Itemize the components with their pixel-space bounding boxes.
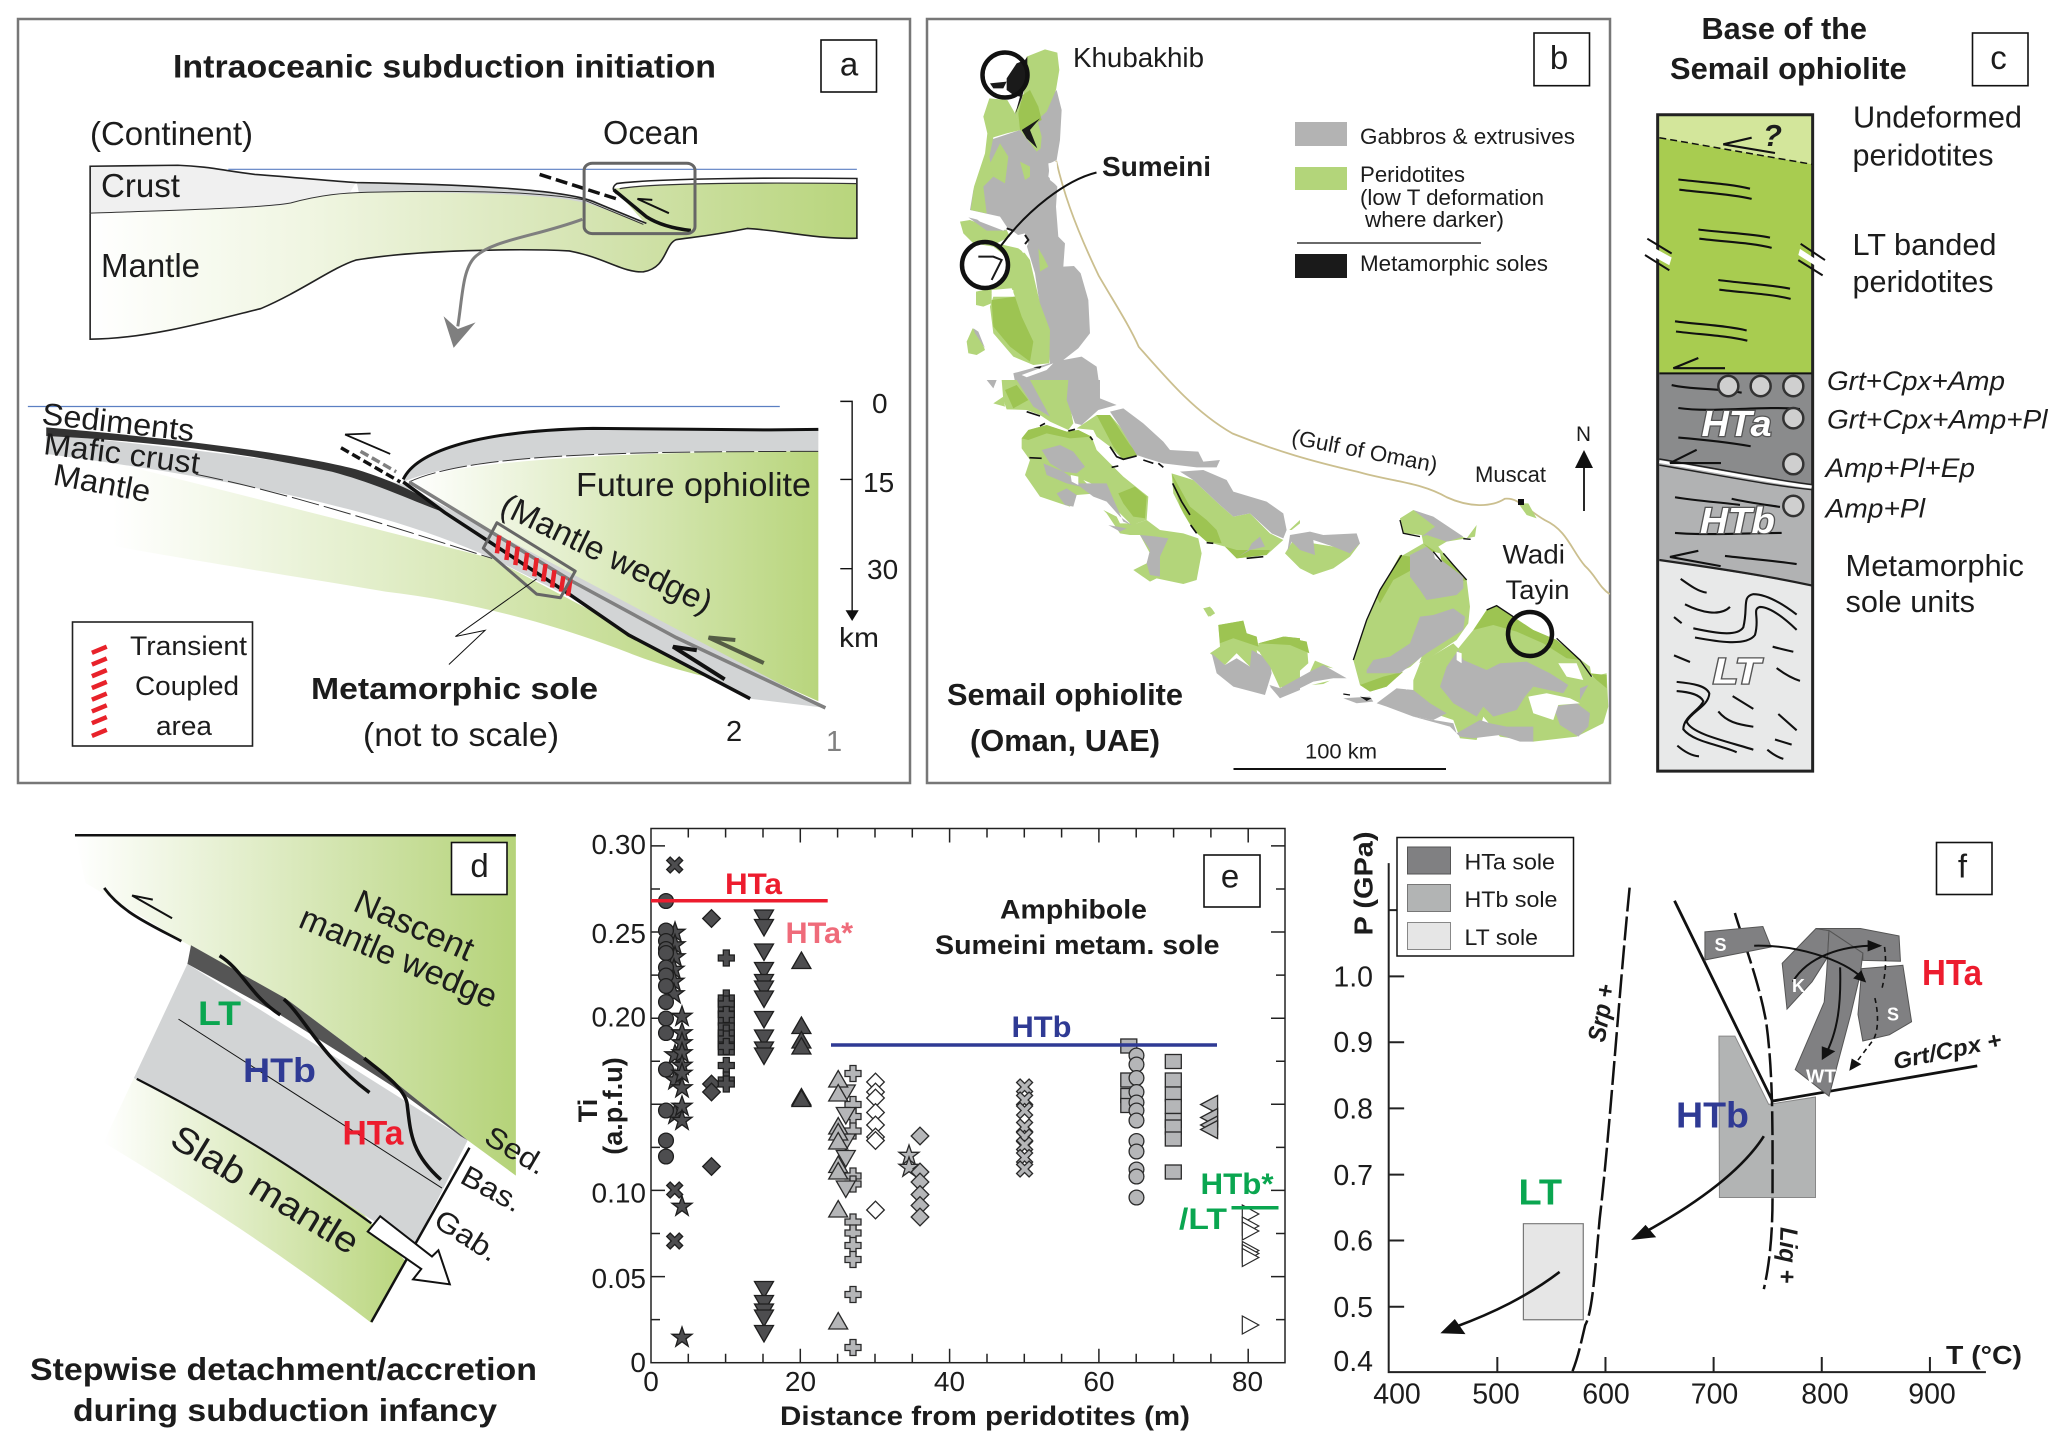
field letters: WT xyxy=(1806,1066,1836,1086)
mineral assemblages: Grt+Cpx+Amp xyxy=(1827,366,2005,396)
stratigraphic column xyxy=(1645,115,1825,771)
panel a labels: 2 xyxy=(726,716,742,748)
map: study area circles xyxy=(962,52,1552,656)
axis titles: T (°C) xyxy=(1946,1340,2022,1370)
panel b: Semail ophiolite map xyxy=(927,19,1610,783)
y axis title: (a.p.f.u) xyxy=(598,1057,628,1155)
panel c letter xyxy=(1972,33,2028,86)
north arrow xyxy=(1575,423,1593,511)
panel d unit labels: LT xyxy=(198,995,241,1033)
panel a labels xyxy=(40,114,842,758)
x axis tick labels: 60 xyxy=(1083,1366,1115,1397)
panel c: base of the ophiolite column xyxy=(1645,12,2049,771)
panel d rock labels: Gab. xyxy=(428,1204,504,1269)
panel a labels: Future ophiolite xyxy=(576,466,811,503)
P-T unit labels xyxy=(1518,952,1983,1212)
panel f letter: f xyxy=(1958,848,1968,884)
panel a: intraoceanic subduction initiation xyxy=(18,19,910,783)
panel e letter: e xyxy=(1221,858,1239,894)
panel d rock labels: mantle wedge xyxy=(294,899,503,1016)
phase boundaries xyxy=(1572,888,1977,1372)
map labels: (Oman, UAE) xyxy=(970,724,1160,758)
x axis tick labels: 40 xyxy=(934,1366,965,1397)
T axis tick labels: 800 xyxy=(1801,1378,1849,1410)
y axis tick labels: 0.20 xyxy=(592,1002,646,1032)
series labels: HTa xyxy=(725,868,782,901)
HTa range line xyxy=(651,899,828,903)
x axis tick labels xyxy=(643,1366,1263,1397)
panel d rock labels: Nascent xyxy=(348,883,480,969)
panel b frame xyxy=(927,19,1610,783)
map legend: Peridotites xyxy=(1360,162,1465,187)
map: northern block xyxy=(960,49,1100,390)
column unit labels: HTb xyxy=(1700,500,1775,541)
P-T path arrows xyxy=(1440,940,1886,1334)
panel a labels: Mantle xyxy=(101,247,200,284)
column annotations: peridotites xyxy=(1852,138,1994,172)
panel d rock labels: Sed. xyxy=(479,1121,552,1182)
mineral assemblages xyxy=(1823,366,2049,524)
phase boundary labels: Srp + xyxy=(1583,982,1621,1044)
panel a labels: (not to scale) xyxy=(363,716,559,753)
mineral assemblages: Amp+Pl xyxy=(1823,494,1926,524)
P axis tick labels: 0.8 xyxy=(1333,1094,1373,1126)
HTb field xyxy=(1719,1036,1815,1198)
chart frame and ticks xyxy=(651,828,1285,1363)
LT range line xyxy=(1232,1206,1278,1210)
map labels xyxy=(947,42,1570,758)
P-T unit labels: HTa xyxy=(1922,952,1983,993)
axis titles xyxy=(1348,832,2022,1370)
chart title: Amphibole xyxy=(1000,894,1147,924)
Muscat marker xyxy=(1518,499,1524,505)
panel d: stepwise detachment sketch xyxy=(30,835,552,1428)
nascent mantle wedge xyxy=(75,835,516,1176)
panel a title: Intraoceanic subduction initiation xyxy=(173,48,716,84)
P-T unit labels: LT xyxy=(1518,1172,1562,1212)
field letters: K xyxy=(1792,976,1805,996)
panel a labels: Ocean xyxy=(603,114,699,151)
red hatch: transient coupled area xyxy=(497,536,570,596)
panel a labels: Mafic crust xyxy=(42,426,202,481)
panel d unit labels xyxy=(198,995,405,1152)
question mark: ? xyxy=(1763,118,1782,153)
map labels: Muscat xyxy=(1475,462,1546,487)
map labels: (Gulf of Oman) xyxy=(1290,424,1440,477)
chart title xyxy=(935,894,1220,960)
panel d rock labels: Bas. xyxy=(455,1160,528,1219)
depth scale: km xyxy=(839,622,879,653)
panel a letter xyxy=(821,40,876,92)
LT field xyxy=(1523,1224,1583,1320)
legend: transient coupled area: Coupled xyxy=(135,671,239,701)
panel f letter xyxy=(1936,842,1992,894)
depth scale: 30 xyxy=(867,554,898,585)
panel a labels: Mantle xyxy=(51,457,153,509)
P axis tick labels: 0.7 xyxy=(1333,1160,1373,1192)
panel e: amphibole Ti scatter chart xyxy=(573,828,1285,1431)
panel d rock labels xyxy=(164,883,552,1269)
field letters: S xyxy=(1887,1004,1899,1024)
column unit labels: LT xyxy=(1713,650,1763,692)
y axis tick labels xyxy=(592,829,646,1378)
panel a labels: Metamorphic sole xyxy=(311,671,598,706)
map labels: Sumeini xyxy=(1102,151,1211,182)
cross section: future ophiolite and mantle wedge xyxy=(28,406,825,708)
crust layers and thrusts xyxy=(104,888,469,1322)
white subduction arrow xyxy=(368,1216,450,1284)
column annotations: peridotites xyxy=(1852,265,1994,299)
panel f: P-T diagram xyxy=(1333,832,2022,1410)
y axis title xyxy=(573,1057,628,1155)
x axis title: Distance from peridotites (m) xyxy=(780,1401,1190,1431)
panel b letter: b xyxy=(1550,39,1568,76)
HTb range line xyxy=(831,1043,1217,1047)
HTb star / LT data points xyxy=(1242,1205,1259,1334)
mineral assemblages: Grt+Cpx+Amp+Pl xyxy=(1827,404,2049,434)
series labels xyxy=(725,868,1274,1236)
north arrow: N xyxy=(1576,423,1591,446)
mineral assemblages: Amp+Pl+Ep xyxy=(1823,453,1975,483)
leader line to Sumeini xyxy=(1000,172,1096,247)
callout box and leader to metamorphic sole xyxy=(449,523,575,665)
panel a labels: (Continent) xyxy=(90,115,253,152)
column annotations: LT banded xyxy=(1852,228,1996,262)
column annotations: Undeformed xyxy=(1853,100,2022,134)
HTb data points xyxy=(829,1039,1218,1356)
map: coastline xyxy=(1056,161,1610,594)
cross section: continent to ocean xyxy=(90,163,857,339)
map legend: where darker) xyxy=(1364,207,1504,232)
scale bar: 100 km xyxy=(1305,740,1377,764)
T axis tick labels: 700 xyxy=(1691,1378,1738,1410)
panel a labels: (Mantle wedge) xyxy=(495,486,719,621)
P-T unit labels: HTb xyxy=(1676,1094,1749,1136)
P axis tick labels xyxy=(1333,962,1373,1378)
map: south-eastern blocks xyxy=(1203,503,1608,742)
panel a labels: Sediments xyxy=(40,396,196,448)
T axis tick labels: 900 xyxy=(1908,1378,1956,1410)
map legend: Gabbros & extrusives xyxy=(1360,124,1575,149)
map: central blocks xyxy=(987,380,1300,698)
legend: transient coupled area: area xyxy=(156,711,213,741)
map legend: Metamorphic soles xyxy=(1360,251,1548,276)
T axis tick labels xyxy=(1373,1378,1956,1410)
y axis tick labels: 0.05 xyxy=(592,1263,646,1294)
map labels: Tayin xyxy=(1506,575,1570,605)
panel c title: Semail ophiolite xyxy=(1670,52,1907,86)
P-T legend: HTb sole xyxy=(1464,887,1558,912)
panel a labels: Crust xyxy=(101,167,180,204)
P axis tick labels: 0.6 xyxy=(1333,1226,1373,1258)
panel c title: Base of the xyxy=(1702,12,1867,46)
map legend xyxy=(1295,122,1575,278)
phase boundary labels xyxy=(1583,982,2004,1284)
panel d unit labels: HTb xyxy=(243,1052,316,1090)
P-T legend xyxy=(1397,838,1574,956)
series labels: HTa* xyxy=(786,917,853,950)
map labels: Wadi xyxy=(1502,540,1565,570)
x axis tick labels: 20 xyxy=(785,1366,816,1397)
map labels: Khubakhib xyxy=(1073,42,1204,73)
series labels: HTb* xyxy=(1200,1168,1274,1201)
depth scale xyxy=(839,388,898,653)
column annotations: sole units xyxy=(1846,585,1975,619)
P axis tick labels: 1.0 xyxy=(1333,962,1373,994)
phase boundary labels: Grt/Cpx + xyxy=(1891,1026,2004,1074)
P axis tick labels: 0.5 xyxy=(1333,1292,1373,1324)
panel b letter xyxy=(1534,33,1590,86)
y axis tick labels: 0.30 xyxy=(592,829,646,860)
column unit labels xyxy=(1700,403,1775,692)
y axis title: Ti xyxy=(573,1099,603,1122)
field letters: S xyxy=(1714,935,1727,955)
P axis tick labels: 0.9 xyxy=(1333,1027,1373,1059)
panel a letter: a xyxy=(840,46,859,82)
HTa data points xyxy=(659,857,811,1346)
panel a labels: 1 xyxy=(826,726,842,758)
depth scale: 0 xyxy=(872,388,888,419)
axis titles: P (GPa) xyxy=(1348,832,1378,935)
panel d letter xyxy=(452,842,507,894)
P-T legend: LT sole xyxy=(1464,925,1538,950)
legend: transient coupled area xyxy=(72,622,252,746)
panel d caption: during subduction infancy xyxy=(73,1392,498,1428)
axes and ticks xyxy=(1389,863,1986,1372)
P axis tick labels: 0.4 xyxy=(1333,1346,1373,1378)
y axis tick labels: 0 xyxy=(630,1347,646,1378)
map legend: (low T deformation xyxy=(1360,185,1544,210)
map labels: Semail ophiolite xyxy=(947,678,1183,712)
series labels: HTb xyxy=(1012,1011,1072,1044)
panel c title xyxy=(1670,12,1907,86)
HTa fields xyxy=(1705,927,1912,1096)
panel d caption xyxy=(30,1351,537,1428)
series labels: /LT xyxy=(1179,1203,1227,1236)
column unit labels: HTa xyxy=(1702,403,1772,444)
x axis tick labels: 80 xyxy=(1232,1366,1263,1397)
T axis tick labels: 500 xyxy=(1472,1378,1520,1410)
arrow: zoom into subduction detail xyxy=(444,219,582,348)
panel a frame xyxy=(18,19,910,783)
column annotations xyxy=(1846,100,2024,619)
field letters xyxy=(1714,935,1899,1086)
chart title: Sumeini metam. sole xyxy=(935,930,1220,960)
legend: transient coupled area: Transient xyxy=(130,631,248,661)
y axis tick labels: 0.25 xyxy=(592,918,646,949)
phase boundary labels: Liq + xyxy=(1773,1227,1802,1284)
T axis tick labels: 600 xyxy=(1582,1378,1630,1410)
panel e letter xyxy=(1204,855,1260,907)
x axis tick labels: 0 xyxy=(643,1366,659,1397)
panel c letter: c xyxy=(1990,39,2007,76)
panel d rock labels: Slab mantle xyxy=(164,1116,367,1262)
y axis tick labels: 0.10 xyxy=(592,1178,646,1208)
slab mantle xyxy=(104,1078,405,1323)
depth scale: 15 xyxy=(863,467,894,498)
panel d caption: Stepwise detachment/accretion xyxy=(30,1351,537,1387)
column annotations: Metamorphic xyxy=(1846,549,2024,583)
T axis tick labels: 400 xyxy=(1373,1378,1421,1410)
panel d unit labels: HTa xyxy=(342,1114,405,1152)
panel d letter: d xyxy=(470,847,489,884)
P-T legend: HTa sole xyxy=(1464,850,1555,874)
